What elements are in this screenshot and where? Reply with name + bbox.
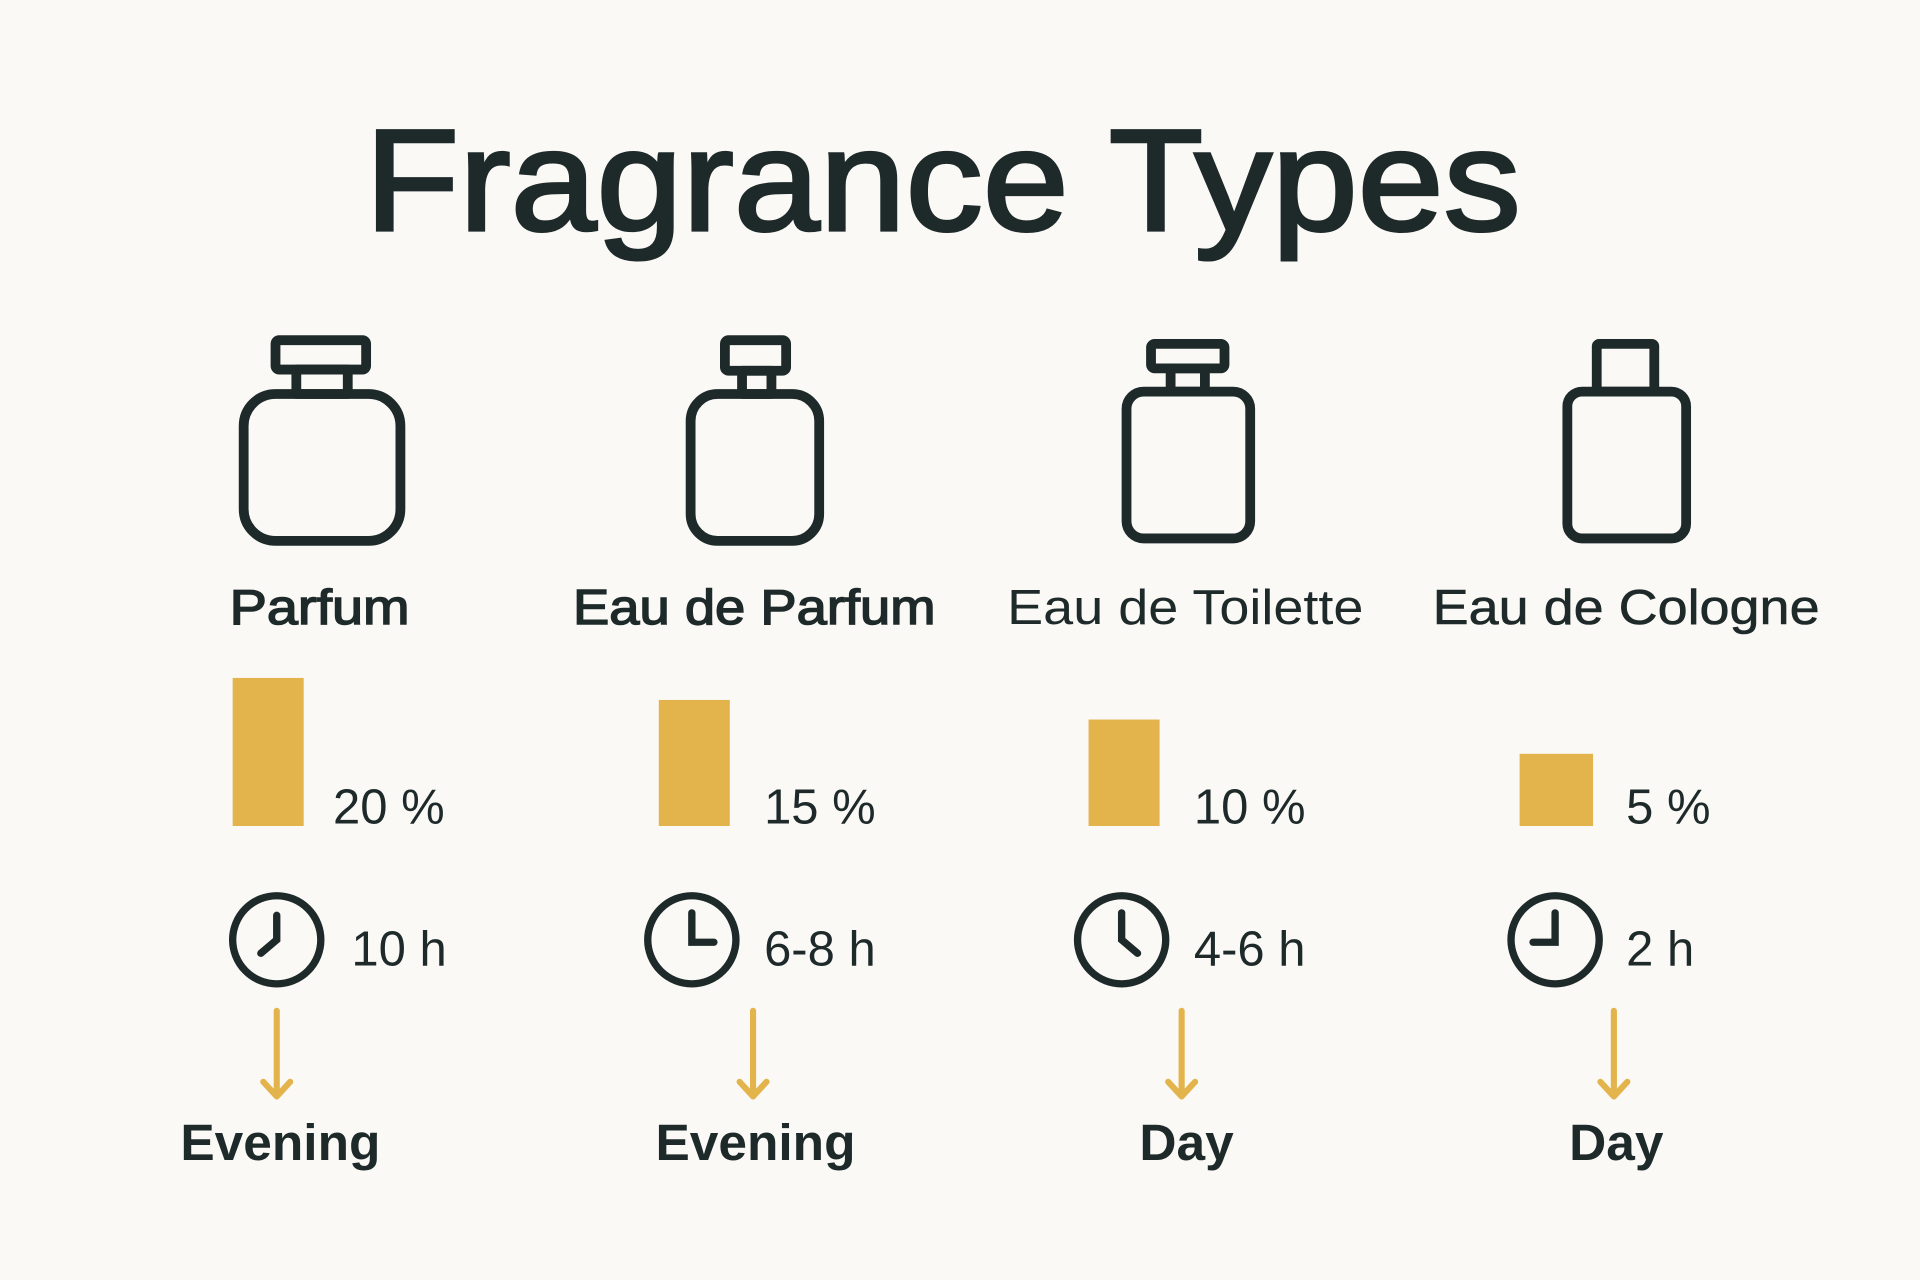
label: Eau de Parfum: Eau de Parfum bbox=[573, 581, 936, 635]
icon: eau de cologne bottle bbox=[1567, 344, 1686, 538]
icon: eau de toilette bottle bbox=[1127, 344, 1250, 538]
text: durations: 2 h bbox=[1626, 923, 1694, 977]
label: Parfum: Parfum bbox=[230, 581, 410, 635]
icon: clocks with durations bbox=[233, 896, 1599, 984]
bar chart: concentration: 20 % bbox=[333, 781, 445, 835]
text: durations bbox=[351, 923, 1694, 977]
labels: occasion: Day bbox=[1139, 1113, 1234, 1171]
label: Eau de Cologne: Eau de Cologne bbox=[1433, 581, 1820, 635]
bar chart: concentration: 10 % bbox=[1194, 781, 1306, 835]
labels: occasion bbox=[180, 1113, 1664, 1171]
bar chart: concentration: 15 % bbox=[764, 781, 876, 835]
icon: parfum bottle bbox=[244, 340, 400, 541]
icon: eau de parfum bottle bbox=[691, 340, 819, 541]
labels: occasion: Evening bbox=[180, 1113, 380, 1171]
bar chart: concentration bbox=[233, 678, 1711, 835]
text: durations: 6-8 h bbox=[764, 923, 876, 977]
labels: occasion: Evening bbox=[656, 1113, 856, 1171]
text: durations: 4-6 h bbox=[1194, 923, 1306, 977]
labels: occasion: Day bbox=[1569, 1113, 1664, 1171]
text: durations: 10 h bbox=[351, 923, 447, 977]
title: Fragrance Types bbox=[365, 99, 1521, 261]
arrows bbox=[263, 1011, 1627, 1096]
label: Eau de Toilette: Eau de Toilette bbox=[1007, 581, 1363, 635]
bar chart: concentration: 5 % bbox=[1626, 781, 1711, 835]
